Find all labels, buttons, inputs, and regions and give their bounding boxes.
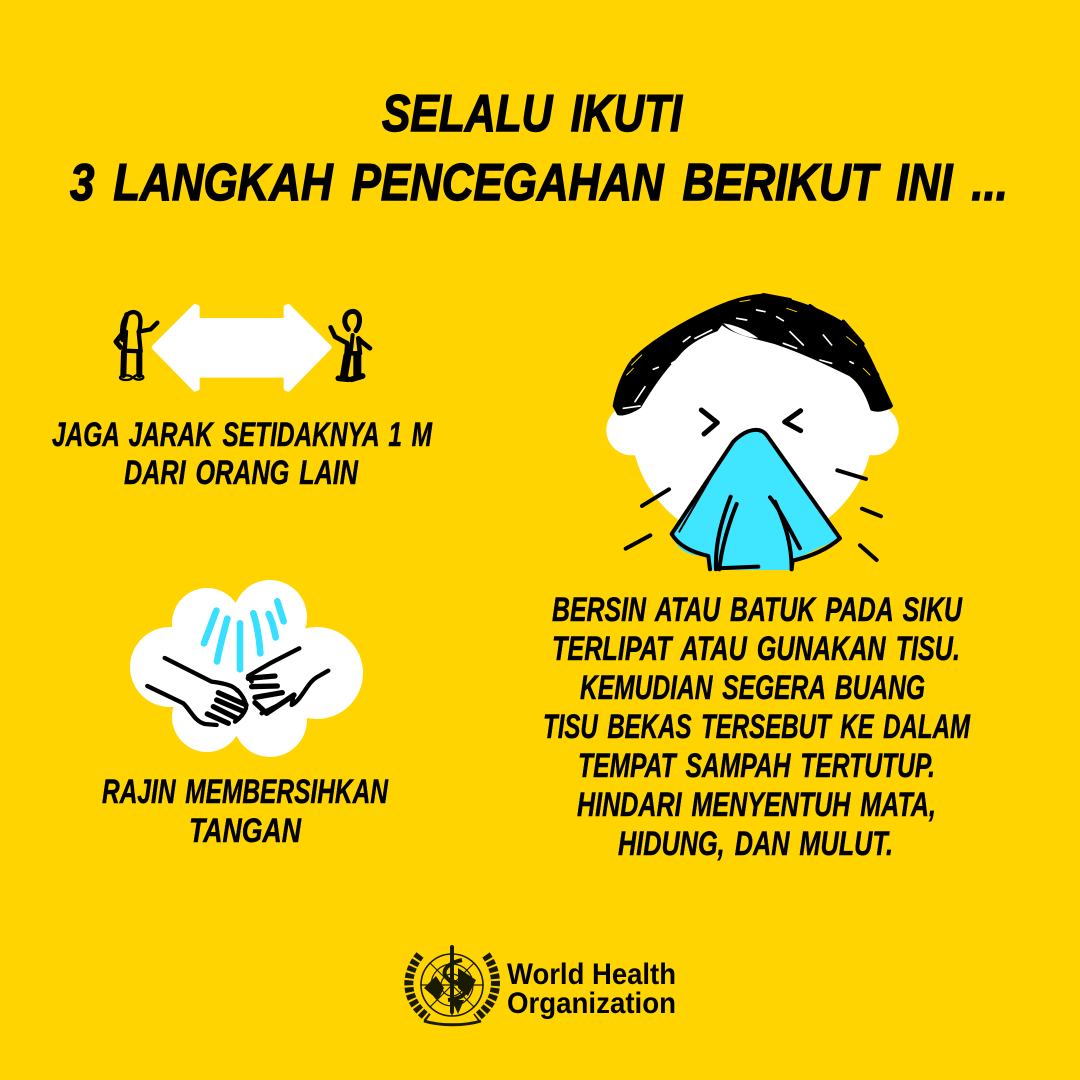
text: sneeze instructions: KEMUDIAN SEGERA BUANG [580, 669, 925, 707]
text: sneeze instructions: HIDUNG, DAN MULUT. [618, 825, 893, 863]
text: clean hands: RAJIN MEMBERSIHKAN [102, 773, 389, 811]
icon: man [331, 311, 370, 379]
logo: World Health Organization [409, 947, 676, 1025]
text: keep distance: DARI ORANG LAIN [124, 454, 359, 492]
hair [614, 295, 892, 414]
emblem [409, 947, 495, 1025]
text: sneeze instructions: HINDARI MENYENTUH MATA, [577, 786, 936, 824]
text: keep distance [52, 416, 432, 492]
icon: sneezing face with tissue [590, 295, 910, 590]
title [70, 85, 1008, 212]
icon: double arrow [154, 306, 329, 389]
wordmark: World Health [507, 958, 676, 991]
left hand [147, 658, 246, 725]
water drops [204, 601, 284, 669]
tissue [672, 428, 840, 570]
icon: woman [116, 312, 157, 380]
text: clean hands: TANGAN [189, 812, 302, 850]
face [606, 302, 899, 545]
title: SELALU IKUTI [382, 85, 683, 143]
logo: World Health Organization: Organization [507, 987, 676, 1020]
right hand [248, 648, 328, 713]
text: clean hands [102, 773, 389, 850]
text: keep distance: JAGA JARAK SETIDAKNYA 1 M [52, 416, 432, 454]
yellow mask below the face [590, 570, 910, 590]
icon: clean hands [130, 580, 363, 757]
eyes [701, 410, 801, 434]
text: sneeze instructions [543, 591, 970, 863]
sneeze lines [626, 470, 881, 560]
icon: distance arrow with two people [116, 306, 370, 389]
cloud [130, 580, 363, 757]
text: sneeze instructions: TEMPAT SAMPAH TERTUTUP. [578, 747, 935, 785]
